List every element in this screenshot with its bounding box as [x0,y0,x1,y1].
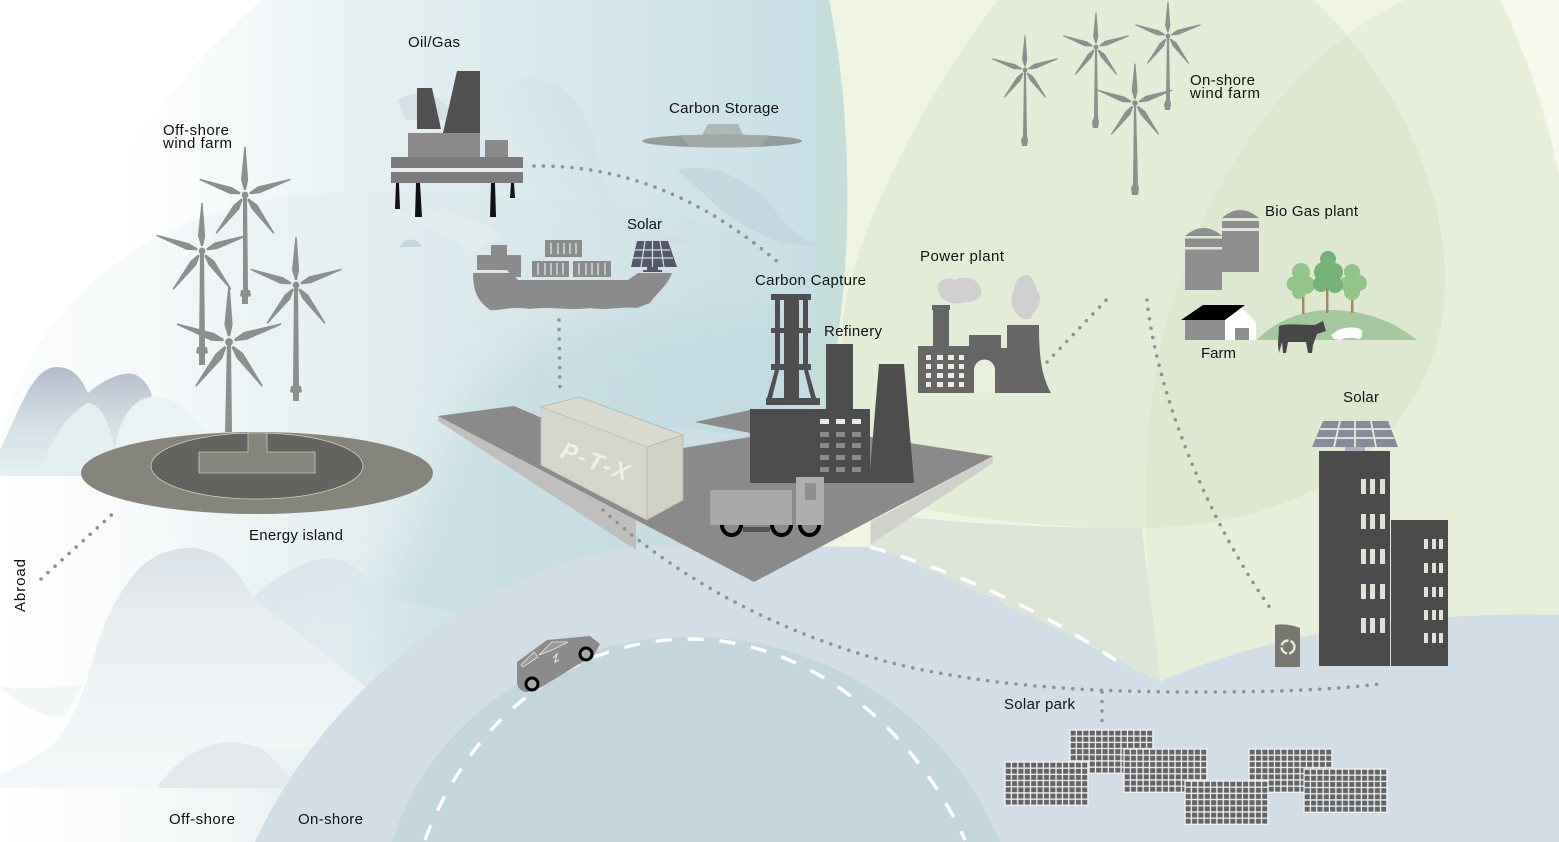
farm landscape [1181,251,1417,353]
label: ship Solar: Solar [627,216,662,233]
turbine C [1134,1,1201,110]
label: Bio Gas plant: Bio Gas plant [1265,203,1359,220]
turbine B [1062,12,1129,128]
dotted link: oil/gas to carbon capture [534,166,780,264]
platform [438,406,993,582]
label: Energy island: Energy island [249,527,343,544]
dotted link: bio gas to recycling [1147,300,1273,612]
label: On-shore wind farm: On-shore [1190,72,1255,89]
carbon storage [642,124,802,148]
background: on-shore dome [255,545,1559,842]
P-T-X container: P-T-X [557,437,635,488]
on-shore wind farm [991,1,1201,195]
turbine 1 [198,147,291,304]
label: Off-shore: Off-shore [169,811,235,828]
dotted link: ship to P-T-X [559,320,560,392]
off-shore wind farm [155,147,342,432]
energy island [81,432,433,514]
label: Solar park: Solar park [1004,696,1076,713]
background: green hills [842,0,1445,528]
dashed road: platform to green [870,547,1118,662]
background: mountains [0,78,820,788]
turbine 4 [175,287,282,432]
label: Abroad: Abroad [12,559,29,612]
label: On-shore wind farm: wind farm [1189,85,1260,102]
power plant [918,275,1051,393]
label: Carbon Storage: Carbon Storage [669,100,779,117]
oil/gas platform [391,71,523,217]
label: Oil/Gas: Oil/Gas [408,34,460,51]
recycling bin [1275,624,1300,667]
dotted link: power plant [1047,294,1112,362]
refinery [750,344,914,483]
P-T-X container [541,397,683,520]
office building [1319,451,1448,666]
pig [1331,328,1362,340]
label: Refinery: Refinery [824,323,882,340]
rooftop solar panel [1312,421,1398,451]
turbine D [1097,64,1173,195]
dotted link: abroad to island [41,509,118,579]
solar park [1005,730,1387,824]
label: On-shore wind farm [1189,72,1260,102]
label: Carbon Capture: Carbon Capture [755,272,866,289]
turbine 3 [249,237,342,401]
truck [710,477,824,535]
trees [1286,251,1367,314]
container ship [473,240,672,310]
label: Off-shore wind farm [162,122,232,152]
dotted link: park branch [1100,692,1104,725]
dashed road: car route [425,639,965,840]
label: On-shore: On-shore [298,811,363,828]
carbon capture tower [766,294,820,405]
bio gas plant [1185,210,1259,290]
label: Power plant: Power plant [920,248,1005,265]
label: Farm: Farm [1201,345,1236,362]
background: road dome [392,637,1000,842]
turbine 2 [155,203,248,365]
turbine A [991,35,1058,146]
label: Off-shore wind farm: Off-shore [163,122,229,139]
cow [1278,321,1326,353]
ship solar panel [631,241,677,272]
label: Off-shore wind farm: wind farm [162,135,232,152]
electric car [517,636,600,692]
dotted link: hub to solar park [603,510,1380,692]
label: building Solar: Solar [1343,389,1379,406]
barn [1181,305,1256,340]
